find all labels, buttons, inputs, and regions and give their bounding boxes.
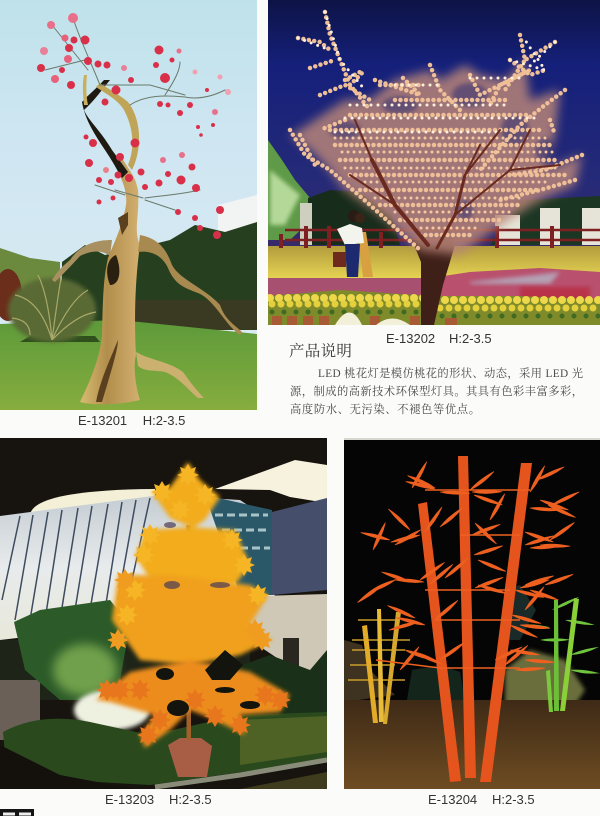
small yellow bamboo [348, 609, 410, 724]
caption: E-13204: H:2-3.5 [492, 792, 535, 807]
small green bamboo [520, 597, 600, 712]
red blossoms [37, 13, 231, 239]
large red bamboo poles [418, 456, 532, 782]
trunk and branches [45, 18, 242, 404]
panel: photo E-13201 red blossom tree in park [0, 0, 257, 410]
panel: photo E-13204 red bamboo LED lights at night [344, 438, 600, 789]
caption: E-13201 [78, 413, 185, 428]
caption: E-13202: E-13202 [386, 331, 435, 346]
panel: photo E-13202 pink LED peach tree at night [268, 0, 600, 325]
panel: photo E-13203 orange maple LED tree by building [0, 438, 327, 790]
heading: product description: 产品说明 [289, 342, 352, 360]
caption: E-13201: H:2-3.5 [143, 413, 185, 428]
caption: E-13201: E-13201 [78, 413, 127, 428]
caption: E-13203: E-13203 [105, 792, 154, 807]
caption: E-13204: E-13204 [428, 792, 477, 807]
text block: product description: 高度防水、无污染、不褪色等优点。 [290, 402, 480, 416]
peach tree trunk [412, 225, 455, 325]
maple trunk [186, 525, 191, 740]
page number fragment [0, 809, 34, 816]
bamboo leaves [356, 462, 580, 672]
caption: E-13203 [105, 792, 212, 807]
caption: E-13202 [386, 331, 492, 346]
caption: E-13202: H:2-3.5 [449, 331, 492, 346]
glowing canopy [290, 12, 582, 255]
text block: product description [290, 366, 583, 416]
text block: product description: LED 桃花灯是模仿桃花的形状、动态，采用 LED 光 [318, 366, 583, 380]
planter pot [168, 738, 212, 777]
orange maple canopy [96, 462, 291, 748]
caption: E-13203: H:2-3.5 [169, 792, 212, 807]
text block: product description: 源，制成的高新技术环保型灯具。其具有色彩丰富多彩， [290, 384, 583, 398]
couple [333, 210, 373, 277]
caption: E-13204 [428, 792, 535, 807]
